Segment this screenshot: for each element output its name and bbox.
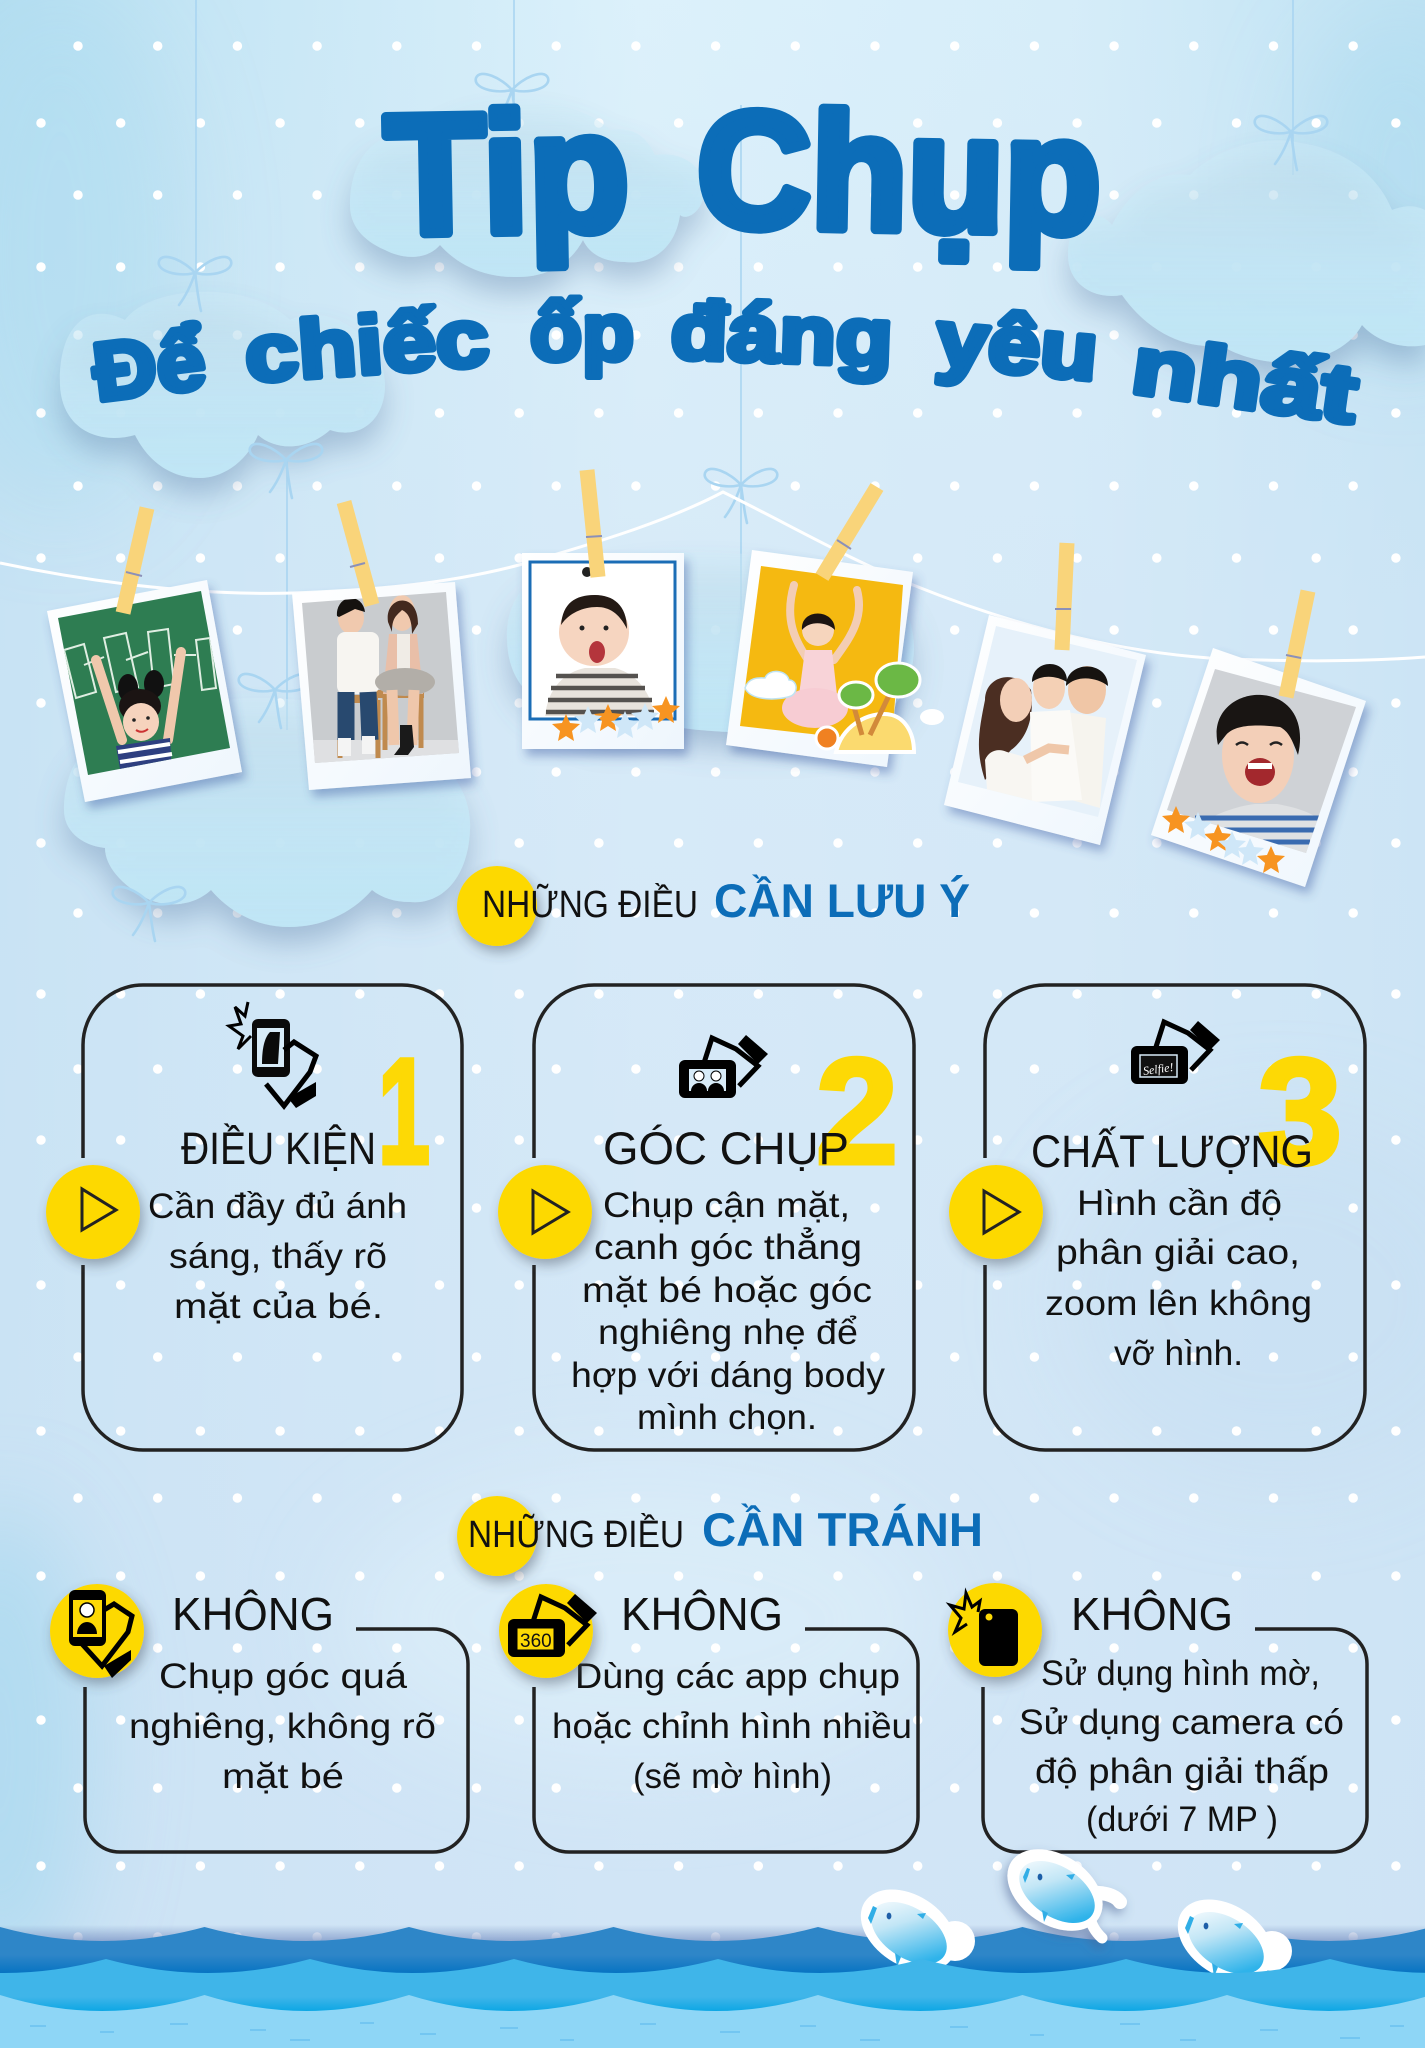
card outline bbox=[534, 1629, 918, 1852]
heading emphasis: CẦN LƯU Ý bbox=[714, 874, 970, 927]
body text: sáng, thấy rõ bbox=[169, 1237, 387, 1276]
icon: 360 phone on yellow disc bbox=[499, 1584, 597, 1678]
fish 3 bbox=[1163, 1883, 1292, 1998]
subtitle: yêu bbox=[932, 293, 1102, 398]
icon: hand holding phone, selfie: Selfie! bbox=[1142, 1060, 1174, 1078]
photo 5: family bbox=[944, 615, 1146, 845]
cloud: top centre bbox=[350, 101, 705, 277]
card outline bbox=[534, 985, 914, 1450]
body text bbox=[129, 1657, 436, 1796]
yellow dot bbox=[457, 1496, 537, 1576]
body text: Sử dụng hình mờ, bbox=[1041, 1654, 1320, 1693]
icon: hand with phone and flash bbox=[229, 1002, 316, 1108]
peg 1 bbox=[123, 508, 147, 613]
body text: nghiêng nhẹ để bbox=[598, 1313, 858, 1352]
play button bbox=[46, 1165, 140, 1259]
photo 4: ballet girl on yellow bbox=[726, 550, 944, 767]
play button bbox=[949, 1165, 1043, 1259]
peg 3 bbox=[586, 470, 602, 577]
body text: Cần đầy đủ ánh bbox=[148, 1187, 407, 1226]
body text bbox=[1019, 1654, 1344, 1839]
heading: ĐIỀU KIỆN bbox=[181, 1123, 376, 1174]
panel: không 3 bbox=[948, 1583, 1367, 1852]
photo 3: baby on white bbox=[522, 553, 684, 749]
play button bbox=[498, 1165, 592, 1259]
cloud: top right bbox=[1068, 140, 1425, 362]
photo 2: two kids on stools bbox=[292, 582, 471, 790]
body text bbox=[148, 1187, 407, 1326]
subtitle: ốp bbox=[530, 287, 634, 378]
fish 1 bbox=[846, 1873, 975, 1988]
body text: hoặc chỉnh hình nhiều bbox=[552, 1707, 912, 1746]
body text: hợp với dáng body bbox=[571, 1356, 886, 1395]
water ripples bbox=[30, 2023, 1404, 2040]
body text: mặt bé hoặc góc bbox=[582, 1271, 872, 1310]
card outline bbox=[983, 1629, 1367, 1852]
photo 6: laughing boy bbox=[1151, 648, 1366, 887]
body text: mình chọn. bbox=[637, 1398, 817, 1437]
body text: zoom lên không bbox=[1045, 1284, 1312, 1323]
heading text: NHỮNG ĐIỀU bbox=[482, 882, 698, 926]
subtitle: chiếc bbox=[242, 292, 492, 400]
body text: Chụp góc quá bbox=[159, 1657, 408, 1696]
cloud: lower left bbox=[64, 698, 470, 927]
heading: CHẤT LƯỢNG bbox=[1031, 1126, 1313, 1177]
body text: phân giải cao, bbox=[1056, 1233, 1300, 1272]
body text: vỡ hình. bbox=[1114, 1334, 1243, 1373]
panel: chất lượng bbox=[949, 985, 1365, 1450]
body text: (dưới 7 MP ) bbox=[1086, 1800, 1278, 1839]
body text: Dùng các app chụp bbox=[575, 1657, 900, 1696]
body text: Hình cần độ bbox=[1077, 1184, 1282, 1223]
peg 2 bbox=[344, 502, 372, 605]
cloud: left bbox=[60, 292, 385, 478]
body text: mặt của bé. bbox=[174, 1287, 383, 1326]
heading: KHÔNG bbox=[172, 1588, 334, 1640]
waves and fish bbox=[0, 1832, 1425, 2048]
icon: hand holding phone, selfie bbox=[1131, 1021, 1220, 1084]
peg 5 bbox=[1055, 543, 1071, 650]
clothes pegs bbox=[123, 470, 1308, 697]
subtitle: nhất bbox=[1126, 320, 1363, 441]
title bbox=[88, 77, 1363, 441]
clothesline bbox=[0, 492, 1425, 661]
cloud: centre behind photos bbox=[507, 552, 914, 733]
heading: KHÔNG bbox=[621, 1588, 783, 1640]
heading emphasis: CẦN TRÁNH bbox=[702, 1503, 983, 1556]
shadow above back wave bbox=[0, 1925, 1425, 1941]
title line 1: Chụp: Chụp bbox=[695, 77, 1103, 268]
body text: canh góc thẳng bbox=[594, 1227, 862, 1267]
number 2: 2 bbox=[816, 1027, 898, 1195]
heading text: NHỮNG ĐIỀU bbox=[468, 1512, 684, 1556]
icon: 360 phone on yellow disc: 360 bbox=[520, 1631, 552, 1652]
fish 2 bbox=[992, 1832, 1120, 1948]
body text: độ phân giải thấp bbox=[1035, 1752, 1329, 1791]
photo 1: girl with barbell bbox=[47, 580, 242, 802]
body text bbox=[1045, 1184, 1312, 1373]
front water bbox=[0, 1995, 1425, 2048]
heading: những điều cần lưu ý bbox=[457, 866, 970, 946]
bows bbox=[113, 74, 1327, 941]
card outline bbox=[985, 985, 1365, 1450]
yellow dot bbox=[457, 866, 537, 946]
heading: GÓC CHỤP bbox=[603, 1123, 849, 1174]
icon: phone back with flash on yellow disc bbox=[948, 1583, 1042, 1677]
title line 1: Tip: Tip bbox=[383, 77, 631, 271]
body text bbox=[552, 1657, 912, 1796]
body text: Sử dụng camera có bbox=[1019, 1703, 1344, 1742]
body text: mặt bé bbox=[222, 1757, 344, 1796]
body text bbox=[571, 1186, 886, 1437]
middle wave bbox=[0, 1959, 1425, 2048]
back wave bbox=[0, 1927, 1425, 2048]
heading: những điều cần tránh bbox=[457, 1496, 983, 1576]
number 3: 3 bbox=[1258, 1027, 1342, 1195]
icon: hand holding phone with two faces bbox=[679, 1035, 768, 1098]
card outline bbox=[83, 985, 462, 1450]
panel: không 1 bbox=[50, 1584, 468, 1852]
number 1: 1 bbox=[378, 1027, 430, 1195]
hanging strings bbox=[196, 0, 1293, 730]
subtitle bbox=[88, 285, 1363, 441]
icon: selfie phone on yellow disc bbox=[50, 1584, 144, 1678]
panel: điều kiện bbox=[46, 985, 462, 1450]
body text: nghiêng, không rõ bbox=[129, 1707, 436, 1746]
subtitle: Để bbox=[88, 315, 210, 419]
heading: KHÔNG bbox=[1071, 1588, 1233, 1640]
panel: không 2 bbox=[499, 1584, 918, 1852]
card outline bbox=[85, 1629, 468, 1852]
peg 4 bbox=[822, 487, 877, 577]
panel: góc chụp bbox=[498, 985, 914, 1450]
body text: (sẽ mờ hình) bbox=[633, 1757, 832, 1796]
peg 6 bbox=[1286, 591, 1308, 697]
body text: Chụp cận mặt, bbox=[603, 1186, 850, 1225]
subtitle: đáng bbox=[669, 285, 894, 384]
